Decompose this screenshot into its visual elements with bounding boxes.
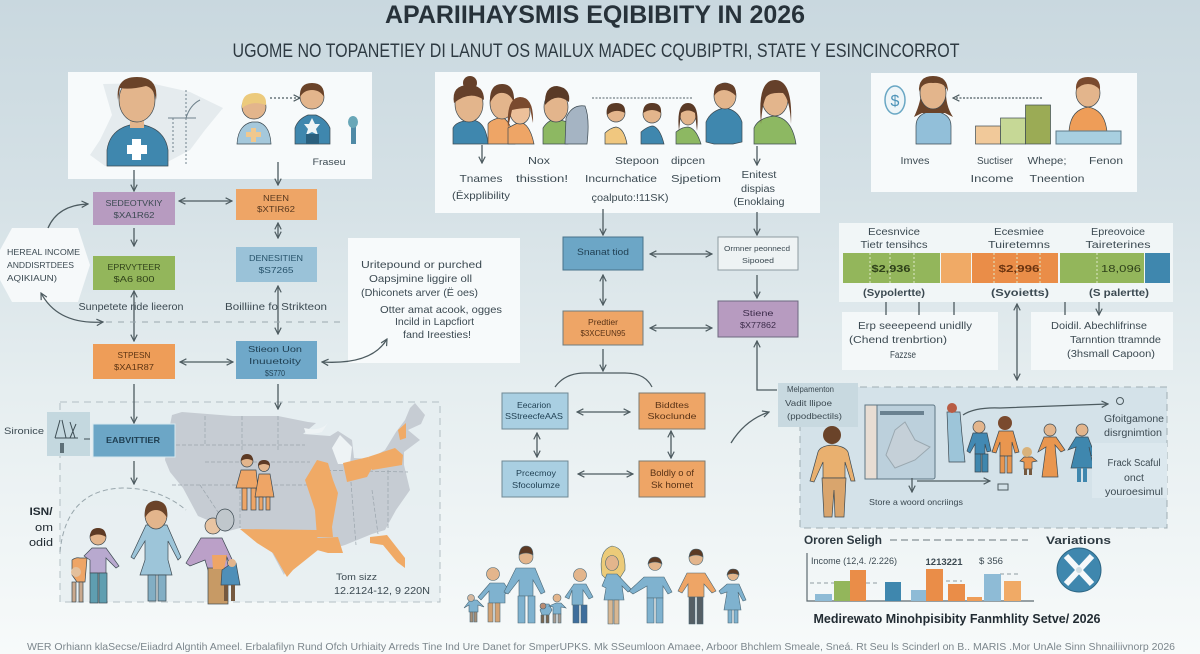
labels: Suctiser [977,155,1013,167]
labels: dipcen [671,156,705,167]
label: ISN om odid [29,506,53,549]
box: orange lower centre: Skoclunde [648,411,697,421]
side text [1092,414,1167,498]
note box left: Fazzse [890,350,916,361]
hexagon note: income: AQIKIAUN) [7,273,57,283]
icon: dollar coin: $ [891,93,900,110]
note box right: Tarnntion ttramnde [1070,335,1161,346]
label box: Vadit llipoe [785,398,832,408]
labels: Sjpetiom [671,173,721,185]
side text: disrgnimtion [1104,428,1162,439]
labels: Incurnchatice [585,173,657,185]
box: blue lower: Inuuetoity [249,356,302,366]
box: purple centre: Stiene [742,308,774,318]
icon: adult with cross [107,77,168,166]
label box: (ppodbectils) [787,411,842,421]
label: ISN om odid: ISN/ [30,506,52,518]
hexagon note: income: HEREAL INCOME [7,247,80,257]
document with map [865,405,935,479]
icon: girl [914,76,953,144]
box: blue bottom: Prcecmoy [516,468,557,478]
box: orange bottom [639,461,705,497]
label: ISN om odid: om [35,522,53,534]
labels: çoalputo:!11SK) [592,192,668,204]
note box right: Doidil. Abechlifrinse [1051,321,1147,332]
labels [452,145,784,208]
caption: Store a woord oncriings [869,497,963,507]
box: purple centre: $X77862 [740,320,776,330]
box: orange lower [93,344,175,379]
panel: middle note: Uritepound or purched [361,259,482,271]
panel: family with documents [778,383,1167,528]
labels: Enitest [742,170,777,181]
labels: (Enoklaing [734,197,784,208]
map of USA [165,403,425,577]
dashed arc [60,488,186,552]
bar chart: $ 356 [979,556,1003,566]
bars [976,105,1050,144]
labels: dispias [741,184,775,195]
band segments: $2,936 [872,263,911,275]
dashed arrow [270,97,300,99]
box: blue lower [236,341,317,379]
icon: child [237,93,271,144]
panel: income figures top right [871,73,1137,192]
labels: Imves [900,155,930,167]
band captions: (S palertte) [1089,288,1149,299]
note box right [1031,312,1173,370]
chart caption: Medirewato Minohpisibity Fanmhlity Setve/ 2026 [814,612,1101,626]
box: orange bottom: Sk homet [651,480,694,490]
band captions: (Syoietts) [991,288,1049,299]
box: education [502,393,568,429]
band headings: Tuiretemns [988,240,1050,251]
box: education: SStreecfeAAS [505,411,563,421]
map date label [334,572,430,597]
band headings: Epreovoice [1091,227,1145,238]
band captions: (Sypolertte) [863,288,925,299]
box: white centre: Ormner peonnecd [724,244,790,253]
panel: income band [839,223,1173,302]
icon: tool [348,116,358,144]
box: orange lower centre [639,393,705,429]
labels: Stepoon [615,155,659,167]
title: APARIIHAYSMIS EQIBIBITY IN 2026 [385,1,805,29]
side text: youroesimul [1105,487,1163,498]
labels: Fenon [1089,155,1123,167]
band headings: Ecesmiee [994,227,1044,238]
box: orange top: NEEN [263,193,289,203]
family portraits [453,76,796,144]
label: Sironice: Sironice [4,426,44,437]
box: blue centre: Snanat tiod [577,247,629,257]
box: purple: SEDEOTVKIY [106,198,163,208]
chart sketch [168,90,200,165]
panel: family labels top centre [435,72,820,213]
map couple [236,454,274,510]
box: purple: $XA1R62 [114,210,155,220]
labels: Tnames [460,173,502,185]
note box left [842,312,998,370]
box: blue [236,247,317,282]
map date label: 12.2124-12, 9 220N [334,586,430,597]
panel: middle note [348,238,520,363]
labels: thisstion! [516,173,568,185]
label: Fraseu [312,157,346,168]
box: Eabvittier [93,424,175,457]
box: blue: $S7265 [258,265,294,275]
icon panel: lab tools [47,412,90,456]
subtitle: UGOME NO TOPANETIEY DI LANUT OS MAILUX MADEC CQUBIPTRI, STATE Y ESINCINCORROT [232,41,960,62]
arrows [912,398,1124,492]
label box: Melpamenton [787,384,834,394]
band headings: Taireterines [1086,240,1150,251]
side text: onct [1124,473,1144,484]
box: blue bottom: Sfocolumze [512,480,560,490]
caption: right flow: Boilliine fo Strikteon [225,302,327,313]
label: ISN om odid: odid [29,537,53,549]
side text: Gfoitgamone [1104,414,1164,425]
arrows under band [886,302,1099,380]
band segments [843,253,1170,283]
box: green: $A6 800 [114,274,155,284]
label box [778,383,858,427]
box: orange centre [563,311,643,345]
family: three figures [71,501,240,604]
band segments: 18,096 [1101,263,1141,275]
bar chart: 1213221 [926,557,962,567]
box: blue lower: $S770 [265,368,285,378]
note box left: Erp seeepeend unidlly [858,321,972,332]
box: white centre [718,237,798,270]
box: blue bottom [502,461,568,497]
band headings [860,227,1150,251]
box: orange centre: Predtier [588,317,618,327]
panel: middle note: Oapsjmine liggire oll [369,273,472,285]
family of five [947,403,1095,482]
bar chart [807,553,1034,601]
box: orange bottom: Boldly o of [650,468,695,478]
hexagon note: income [0,228,90,302]
box: blue centre [563,237,643,270]
note box left: (Chend trenbrtion) [849,335,947,346]
orange states [240,423,406,577]
box: orange lower centre: Biddtes [655,400,689,410]
box: green [93,256,175,290]
labels: (Ēxpplibility [452,190,511,202]
band captions [863,288,1149,299]
family row bottom centre [464,546,746,624]
labels: Nox [528,155,551,167]
icon: adult in blue shirt [295,83,330,144]
side text: Frack Scaful [1108,458,1160,469]
box: green: EPRVYTEER [108,262,160,272]
panel: top-left people [68,72,372,179]
box: white centre: Sipooed [742,256,774,265]
box: education: Eecarion [517,400,551,410]
dashed arrow [953,97,1042,99]
box: orange lower: STPESN [118,350,150,360]
icon: dollar coin [885,86,905,114]
icon: variations badge [1057,548,1101,592]
chart heading: Ororen Seligh [804,535,882,547]
box: orange top [236,189,317,220]
box: Eabvittier: EABVITTIER [106,435,160,445]
box: purple [93,192,175,225]
labels: Whepe; [1028,155,1066,167]
chart: variations heading: Variations [1046,535,1111,547]
panel: middle note: Otter amat acook, ogges [380,304,502,316]
labels: Tneention [1030,173,1085,185]
box: orange lower: $XA1R87 [114,362,154,372]
panel: middle note: fand Ireesties! [403,329,471,341]
box: orange centre: $3XCEUN95 [580,328,626,338]
standing man [810,426,855,517]
bar chart: Income (12,4. /2.226) [811,556,897,566]
band segments: $2,996 [998,263,1040,275]
box: blue: DENESITIEN [249,253,303,263]
flow centre: arrows [537,209,777,474]
band headings: Tietr tensihcs [860,240,928,251]
box: orange top: $XTIR62 [257,204,295,214]
labels: Income [970,173,1014,185]
band headings: Ecesnvice [868,227,920,238]
note box right: (3hsmall Capoon) [1067,349,1155,360]
labels [900,155,1123,185]
box: purple centre [718,301,798,337]
panel: map with family [60,402,440,604]
box: blue lower: Stieon Uon [248,344,302,354]
map date label: Tom sizz [336,572,377,583]
flow left: arrows [41,162,387,484]
footer: WER Orhiann klaSecse/Eiiadrd Algntih Ameel. Erbalafilyn Rund Ofch Urhiaity Arreds Tine Ind Ure Danet for SmperUPKS. Mk SSeumloon Amaee, Arboor Bhchlem Smeale, Sneá. Rt Seu ls Scinderl on B.. MARIS .Mor UnAle Sinn Shnailiivnorp 2026 [27,642,1175,653]
hexagon note: income: ANDDISRTDEES [7,260,74,270]
map silhouette [90,83,223,166]
caption: left flow: Sunpetete ride lieeron [78,302,184,313]
icon: man with map [1056,77,1121,144]
panel: middle note: (Dhiconets arver (Ë oes) [361,287,478,299]
panel: middle note: Incild in Lapcfiort [395,316,474,328]
